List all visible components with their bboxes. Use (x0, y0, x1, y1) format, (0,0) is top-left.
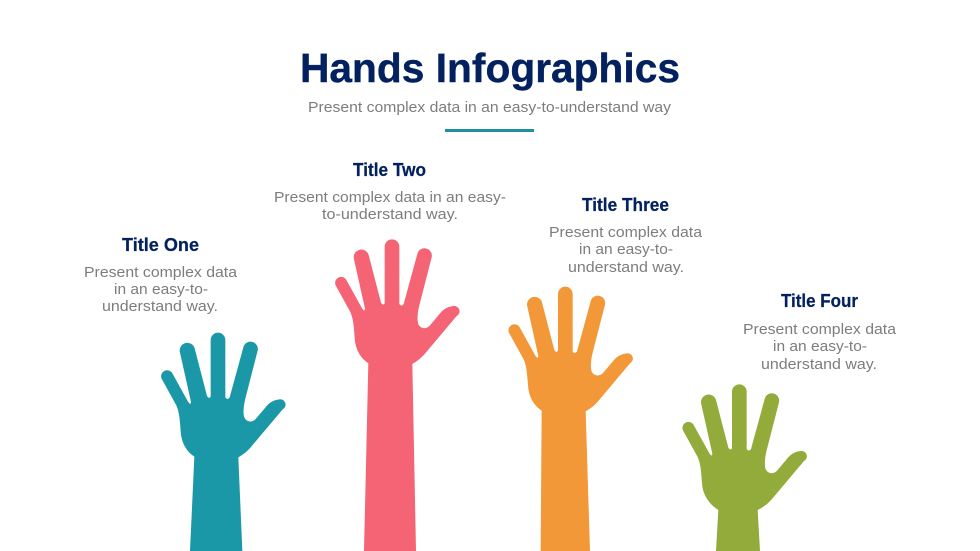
icon: pink hand (335, 239, 460, 551)
icon: teal hand (161, 333, 286, 551)
text block: title two: to-understand way. (322, 207, 458, 223)
text block: title two (274, 190, 506, 223)
subtitle: Present complex data in an easy-to-understand way (308, 99, 672, 116)
text block: title one (84, 265, 238, 315)
panel: title three (508, 195, 703, 551)
title: Hands Infographics (300, 45, 680, 91)
text block: title four: in an easy-to- (773, 339, 867, 355)
title underline (445, 129, 534, 132)
text block: title four (743, 322, 897, 373)
text block: title one: understand way. (102, 299, 218, 315)
text block: title one: in an easy-to- (114, 282, 208, 298)
panel: title one (84, 235, 286, 551)
heading: title two: Title Two (353, 160, 426, 180)
heading: title four: Title Four (781, 291, 858, 311)
panel: title four (682, 291, 897, 551)
text block: title two: Present complex data in an easy- (274, 190, 506, 206)
icon: green hand (682, 384, 807, 551)
text block: title three: Present complex data (549, 225, 703, 241)
text block: title three (549, 225, 703, 276)
panel: title two (274, 160, 506, 551)
heading: title one: Title One (122, 235, 199, 255)
heading: title three: Title Three (582, 195, 669, 215)
text block: title one: Present complex data (84, 265, 238, 281)
text block: title four: understand way. (761, 357, 877, 373)
text block: title three: understand way. (568, 260, 684, 276)
text block: title three: in an easy-to- (579, 242, 673, 258)
text block: title four: Present complex data (743, 322, 897, 338)
icon: orange hand (508, 287, 633, 551)
